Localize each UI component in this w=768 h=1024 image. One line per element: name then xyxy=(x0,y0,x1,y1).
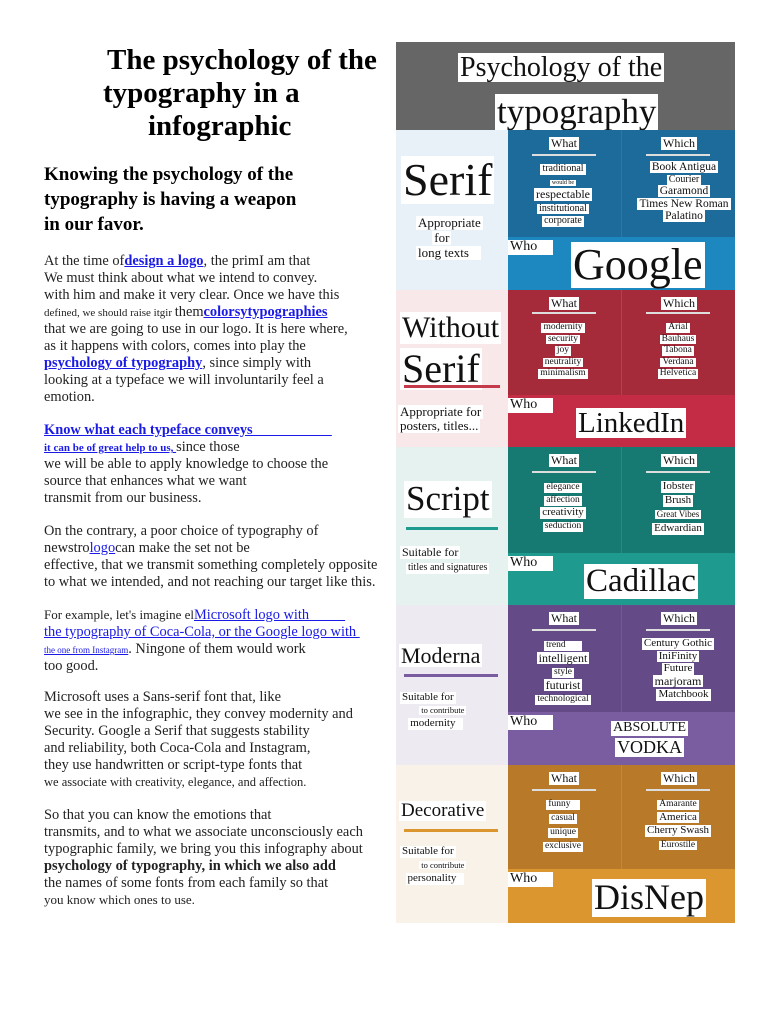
panel: sans serif: Appropriate for xyxy=(400,404,481,419)
subtitle: in our favor. xyxy=(44,214,144,235)
panel: serif: long texts xyxy=(418,245,469,260)
body text: psychology of typography, since simply with xyxy=(44,355,311,371)
panel: moderna: Moderna xyxy=(401,643,480,668)
panel: moderna: Who xyxy=(510,714,537,729)
panel: serif xyxy=(396,130,735,290)
panel: serif: corporate xyxy=(544,215,582,226)
body text: that we are going to use in our logo. It is here where, xyxy=(44,321,348,337)
panel: decorative: funny xyxy=(548,799,571,809)
panel: moderna: Suitable for xyxy=(402,691,454,703)
body text: to what we intended, and not reaching our target like this. xyxy=(44,574,375,590)
panel: sans serif: posters, titles... xyxy=(400,418,478,433)
panel: serif: Which xyxy=(663,136,695,150)
panel: moderna: Matchbook xyxy=(658,688,709,700)
panel: decorative: exclusive xyxy=(545,841,581,851)
body text: psychology of typography, in which we also add xyxy=(44,858,336,874)
panel: sans serif: modernity xyxy=(543,322,583,332)
panel: decorative: DisNep xyxy=(594,877,704,917)
panel: moderna: marjoram xyxy=(655,674,701,688)
panel: serif: Garamond xyxy=(660,185,708,197)
body text: looking at a typeface we will involuntarily feel a xyxy=(44,372,324,388)
body text: On the contrary, a poor choice of typography of xyxy=(44,523,318,539)
body text: For example, let's imagine elMicrosoft logo with xyxy=(44,607,309,623)
panel: decorative: Decorative xyxy=(401,800,484,821)
title: typography in a xyxy=(103,77,300,109)
panel: script: creativity xyxy=(542,506,584,518)
panel: decorative: Suitable for xyxy=(402,845,454,857)
body text: Know what each typeface conveys xyxy=(44,422,253,438)
body text: we associate with creativity, elegance, and affection. xyxy=(44,775,306,789)
body text: the typography of Coca-Cola, or the Google logo with xyxy=(44,624,356,640)
panel: serif: Palatino xyxy=(665,210,703,222)
panel: serif: respectable xyxy=(536,187,590,201)
panel: script: affection xyxy=(546,495,580,505)
subtitle xyxy=(44,164,296,235)
body text: We must think about what we intend to convey. xyxy=(44,270,317,286)
panel: script: titles and signatures xyxy=(408,562,487,573)
body text: we will be able to apply knowledge to choose the xyxy=(44,456,328,472)
panel: serif: Book Antigua xyxy=(652,161,716,173)
panel: serif: Serif xyxy=(403,154,492,205)
panel: script: What xyxy=(551,453,577,467)
panel: script: Iobster xyxy=(663,480,693,492)
panel: moderna: ABSOLUTE xyxy=(613,720,686,735)
body text: typographic family, we bring you this infography about xyxy=(44,841,363,857)
panel: serif: would be xyxy=(552,180,574,186)
body text: the one from Instagram. Ningone of them would work xyxy=(44,641,306,657)
subtitle: typography is having a weapon xyxy=(44,189,296,210)
body text: emotion. xyxy=(44,389,95,405)
panel: serif: Who xyxy=(510,239,537,254)
body text: they use handwritten or script-type fonts that xyxy=(44,757,302,773)
panel: script: elegance xyxy=(546,482,580,492)
panel: decorative: personality xyxy=(408,872,456,884)
panel: script: Brush xyxy=(665,494,691,506)
body text: we see in the infographic, they convey modernity and xyxy=(44,706,353,722)
panel: decorative: Amarante xyxy=(659,799,697,809)
panel: sans serif: Serif xyxy=(402,346,480,391)
panel: moderna: modernity xyxy=(410,717,455,729)
panel: sans serif: What xyxy=(551,296,577,310)
panel: serif: Appropriate xyxy=(418,215,481,230)
panel: decorative: casual xyxy=(551,813,575,823)
panel: decorative: unique xyxy=(550,827,576,837)
panel: moderna: Century Gothic xyxy=(644,637,712,649)
panel: moderna: trend xyxy=(546,640,566,650)
body text: At the time ofdesign a logo, the primI am that xyxy=(44,253,310,269)
body text: with him and make it very clear. Once we have this xyxy=(44,287,339,303)
panel: decorative: America xyxy=(659,810,697,822)
panel: moderna: technological xyxy=(537,694,589,704)
panel: moderna: style xyxy=(554,667,572,677)
panel: decorative: What xyxy=(551,771,577,785)
panel: moderna: intelligent xyxy=(539,650,587,664)
panel: serif: Courier xyxy=(669,174,699,184)
panel: decorative: Which xyxy=(663,771,695,785)
body text: newstrologocan make the set not be xyxy=(44,540,250,556)
panel: moderna: Which xyxy=(663,611,695,625)
panel: sans serif: joy xyxy=(557,345,569,355)
body text: So that you can know the emotions that xyxy=(44,807,271,823)
body text: Microsoft uses a Sans-serif font that, like xyxy=(44,689,281,705)
panel: serif: Times New Roman xyxy=(639,198,729,210)
infographic header: Psychology of the xyxy=(460,52,662,83)
panel: sans serif: minimalism xyxy=(540,368,586,378)
body text: too good. xyxy=(44,658,98,674)
panel: sans serif: Verdana xyxy=(662,356,694,366)
panel: sans serif: Who xyxy=(510,397,537,412)
body text: transmits, and to what we associate unconsciously each xyxy=(44,824,363,840)
panel: sans serif: neutrality xyxy=(545,356,581,366)
title: The psychology of the xyxy=(107,44,377,76)
panel: sans serif: Helvetica xyxy=(660,368,696,378)
panel: decorative: Cherry Swash xyxy=(647,824,709,836)
body text: source that enhances what we want xyxy=(44,473,247,489)
panel: decorative: Who xyxy=(510,871,537,886)
panel: script xyxy=(396,447,735,605)
subtitle: Knowing the psychology of the xyxy=(44,164,293,185)
panel: moderna xyxy=(396,605,735,765)
body text: defined, we should raise itgir themcolorsytypographies xyxy=(44,304,327,320)
panel: serif: institutional xyxy=(539,202,587,214)
panel: script: Script xyxy=(406,479,490,518)
panel: sans serif: LinkedIn xyxy=(578,407,684,439)
panel: script: Cadillac xyxy=(586,563,696,599)
panel: script: Suitable for xyxy=(402,545,458,559)
body text: transmit from our business. xyxy=(44,490,201,506)
panel: serif: Google xyxy=(573,240,703,289)
panel: moderna: futurist xyxy=(546,678,580,692)
panel: moderna: IniFinity xyxy=(659,650,697,662)
panel: decorative: to contribute xyxy=(421,860,464,870)
panel: moderna: Future xyxy=(664,662,692,674)
panel: serif: for xyxy=(434,230,449,245)
body text: Security. Google a Serif that suggests stability xyxy=(44,723,310,739)
body text: the names of some fonts from each family so that xyxy=(44,875,328,891)
panel: script: Who xyxy=(510,555,537,570)
panel: script: Edwardian xyxy=(654,522,702,534)
panel: serif: What xyxy=(551,136,577,150)
panel: script: Great Vibes xyxy=(657,509,699,519)
panel: sans serif: security xyxy=(548,334,578,344)
panel: moderna: What xyxy=(551,611,577,625)
body text: it can be of great help to us, since those xyxy=(44,439,240,455)
panel: sans serif: Which xyxy=(663,296,695,310)
body text: and reliability, both Coca-Cola and Instagram, xyxy=(44,740,310,756)
body text: effective, that we transmit something completely opposite xyxy=(44,557,377,573)
panel: decorative: Eurostile xyxy=(661,840,695,850)
panel: script: seduction xyxy=(545,521,581,531)
panel: decorative xyxy=(396,765,735,923)
title: infographic xyxy=(148,110,291,142)
panel: sans serif: Arial xyxy=(668,322,688,332)
body text: as it happens with colors, comes into play the xyxy=(44,338,306,354)
panel: sans serif: Bauhaus xyxy=(662,334,694,344)
body text xyxy=(44,253,377,907)
panel: moderna: VODKA xyxy=(617,737,682,757)
panel: moderna: to contribute xyxy=(421,705,464,715)
infographic header xyxy=(396,42,735,130)
body text: you know which ones to use. xyxy=(44,892,195,907)
panel: sans serif: Tabona xyxy=(664,345,692,355)
panel: serif: traditional xyxy=(542,163,584,174)
panel: sans serif xyxy=(396,290,735,447)
panel: sans serif: Without xyxy=(402,311,499,344)
title xyxy=(103,44,377,142)
panel: script: Which xyxy=(663,453,695,467)
infographic header: typography xyxy=(497,92,656,131)
